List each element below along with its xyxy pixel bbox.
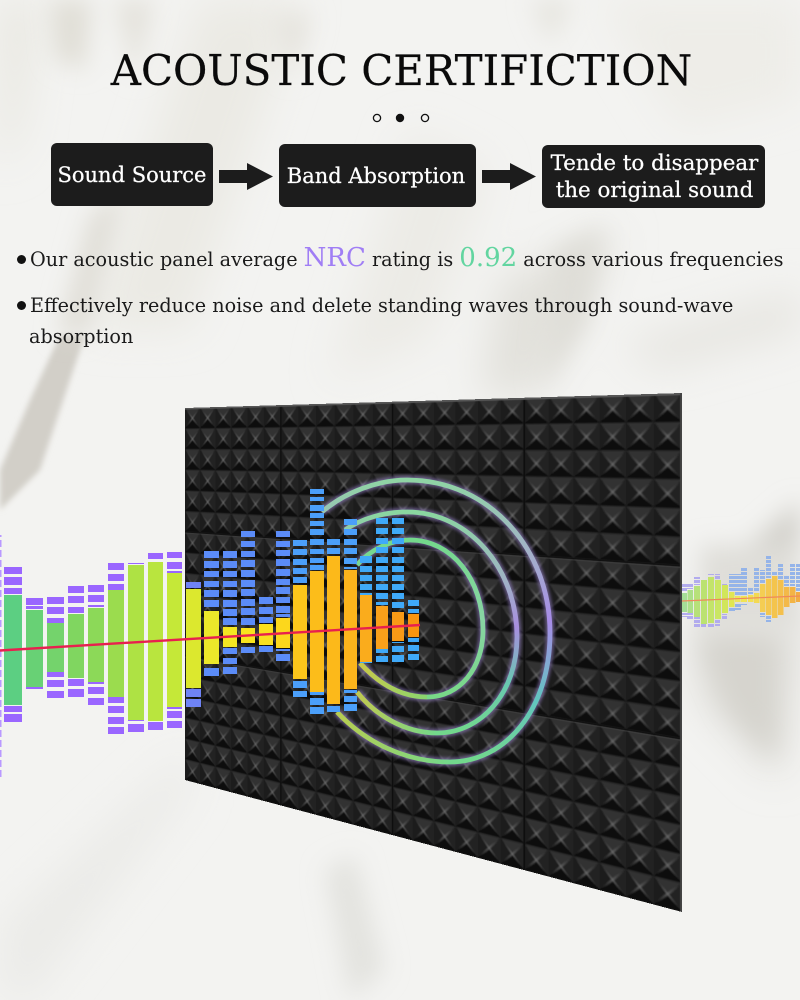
orange center line: [682, 596, 800, 601]
solid bars: [682, 576, 800, 624]
segments right part: [729, 556, 800, 622]
red center line: [0, 625, 420, 650]
yellow and orange solid bars on panel: [186, 556, 419, 704]
bullet text: noise reduction: absorption: [29, 325, 133, 348]
step box: band absorption: [279, 144, 476, 207]
bullet text: noise reduction: Effectively reduce noise and delete standing waves through sound-wave: [30, 294, 733, 317]
edge column cut off at left: [0, 535, 2, 780]
step box: sound source: [51, 143, 213, 206]
step box: band absorption: Band Absorption: [287, 164, 465, 188]
sky blue segments on panel: [360, 518, 419, 663]
segments left part: [682, 574, 727, 627]
step box: tends to disappear: Tende to disappear: [551, 150, 758, 176]
pagination dots: [372, 114, 430, 122]
small faded equalizer wave past the panel: [682, 556, 800, 627]
arrow: band absorption to result: [482, 163, 536, 190]
arrow: sound source to band absorption: [219, 163, 273, 190]
green solid bars on fabric: [4, 562, 182, 721]
indigo segments on panel: [186, 582, 201, 707]
step box: tends to disappear: the original sound: [556, 178, 753, 202]
title: ACOUSTIC CERTIFICTION: [111, 46, 692, 95]
blue segments on panel: [204, 531, 290, 676]
step box: sound source: Sound Source: [58, 162, 206, 186]
step box: tends to disappear: [542, 145, 765, 208]
bullet text: noise reduction: [17, 294, 733, 348]
light blue segments on panel: [293, 489, 357, 714]
bullet text: NRC rating: Our acoustic panel average NRC rating is 0.92 across various frequencies: [30, 243, 783, 273]
acoustic foam panel with pyramid pattern: [185, 393, 682, 912]
purple segments of wave on fabric: [4, 552, 182, 734]
